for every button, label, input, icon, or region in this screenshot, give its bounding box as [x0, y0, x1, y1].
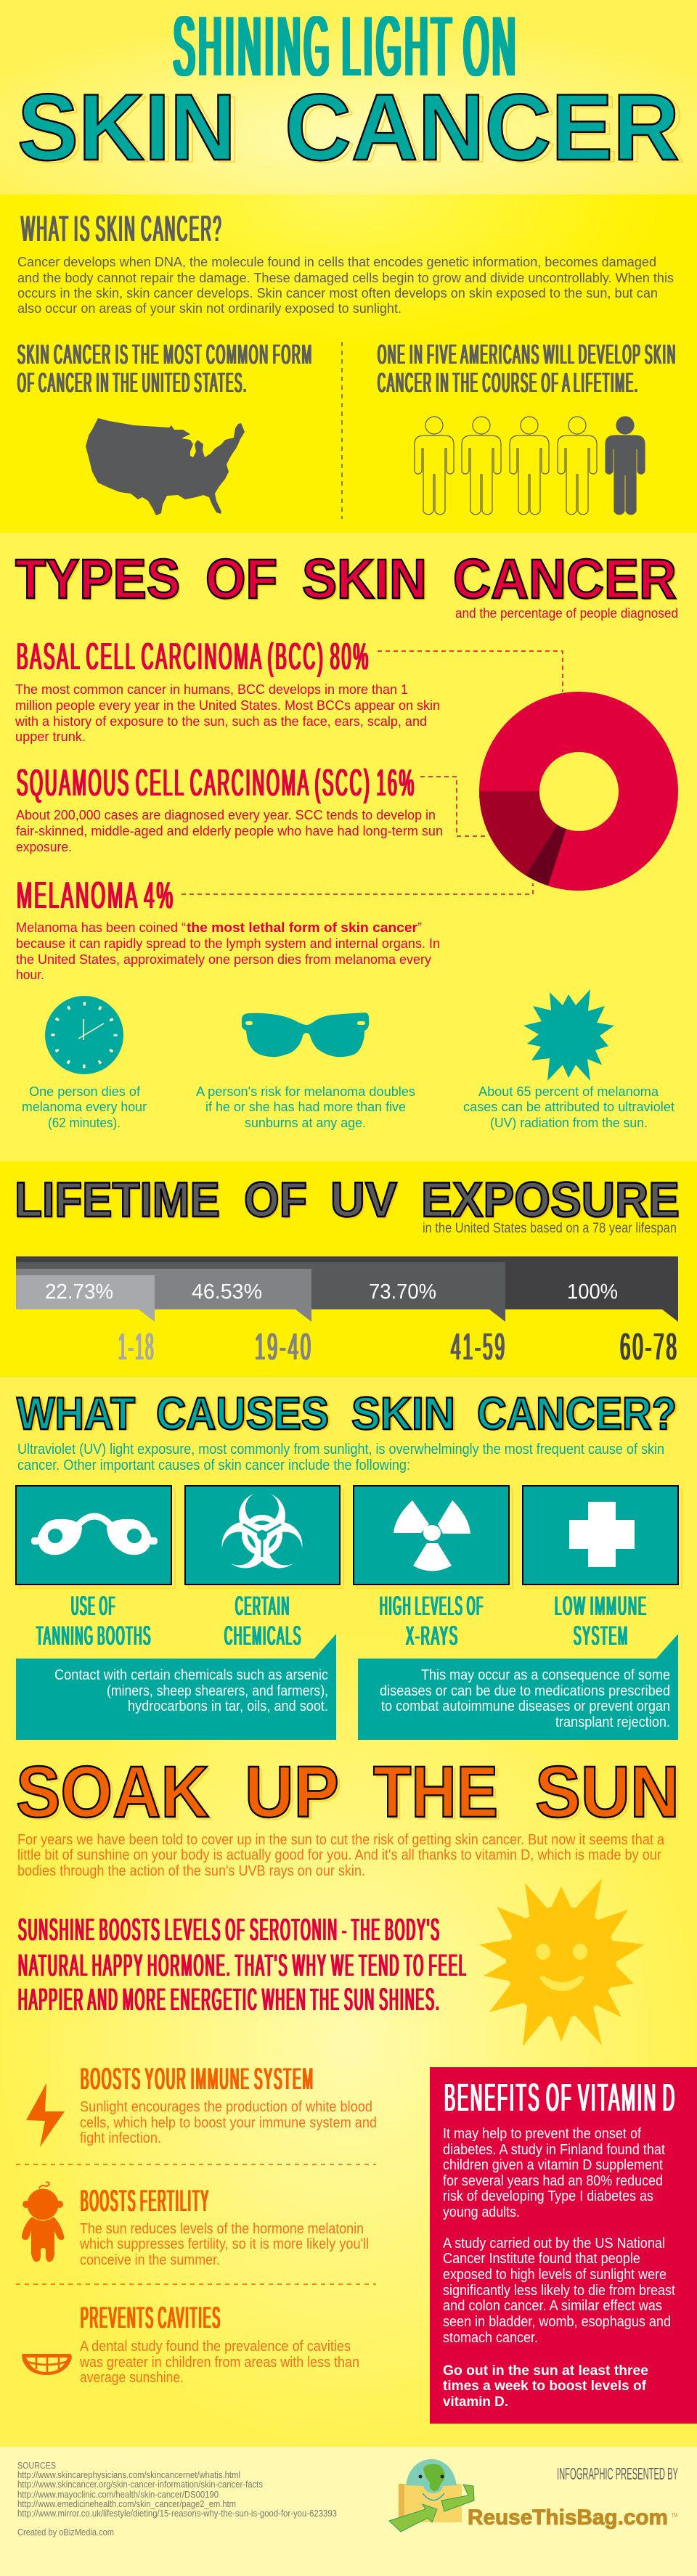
- chart: donut of skin cancer types: [479, 692, 678, 891]
- type: squamous cell carcinoma: About 200,000 cases are diagnosed every year. SCC tends to develop in: [16, 808, 436, 822]
- type: melanoma: the most lethal form of skin cancer: [187, 920, 417, 935]
- chart: cumulative uv bars: 46.53%: [192, 1280, 262, 1304]
- benefit: cavities: [22, 2300, 359, 2386]
- text block: risk of developing Type I diabetes as: [443, 2188, 653, 2204]
- panel: footer: [0, 2447, 697, 2576]
- heading: what causes skin cancer: WHAT: [19, 1389, 137, 1440]
- sources: [17, 2460, 337, 2538]
- connector: melanoma: [182, 883, 533, 894]
- panel: header: [0, 0, 697, 195]
- type: basal cell carcinoma: [15, 636, 440, 744]
- heading: lifetime of uv exposure: EXPOSURE: [423, 1174, 681, 1229]
- caption: sunglasses: sunburns at any age.: [245, 1116, 366, 1130]
- benefit: immune system: BOOSTS YOUR IMMUNE SYSTEM: [81, 2061, 314, 2095]
- heading: types of skin cancer: CANCER: [453, 548, 677, 610]
- heading: soak up the sun: UP: [245, 1751, 339, 1833]
- icon: us map: [86, 418, 245, 515]
- chart: cumulative uv bars: 100%: [567, 1280, 618, 1304]
- caption: clock: [22, 1084, 147, 1130]
- callout: immune system: [358, 1634, 678, 1740]
- sources: http://www.skincancer.org/skin-cancer-information/skin-cancer-facts: [17, 2479, 263, 2490]
- panel: types of skin cancer: [0, 533, 697, 1161]
- title: skin cancer: CANCER: [285, 74, 680, 180]
- benefit: fertility: The sun reduces levels of the hormone melatonin: [80, 2221, 364, 2237]
- type: melanoma: Melanoma has been coined “: [16, 920, 186, 935]
- heading: what causes skin cancer: CAUSES: [158, 1389, 331, 1440]
- logo: reusethisbag: ReuseThisBag.com: [468, 2506, 668, 2530]
- type: melanoma: hour.: [16, 968, 44, 982]
- heading: soak up the sun: SUN: [535, 1751, 680, 1833]
- chart: cumulative uv bars: 73.70%: [369, 1280, 436, 1304]
- icon: five people: [415, 417, 645, 515]
- benefit: immune system: Sunlight encourages the production of white blood: [80, 2099, 372, 2115]
- type: melanoma: the United States, approximately one person dies from melanoma every: [16, 952, 431, 967]
- panel: lifetime of uv exposure: [0, 1161, 697, 1377]
- callout: chemicals: hydrocarbons in tar, oils, and soot.: [128, 1698, 328, 1714]
- text block: A study carried out by the US National: [443, 2236, 665, 2252]
- caption: sunglasses: A person's risk for melanoma doubles: [196, 1084, 415, 1099]
- caption: clock: One person dies of: [29, 1084, 141, 1099]
- stat: most common form: OF CANCER IN THE UNITED STATES.: [17, 368, 248, 398]
- text block: definition: occurs in the skin, skin cancer develops. Skin cancer most often develops on skin exposed to the sun, but can: [17, 286, 658, 300]
- sources: http://www.skincarephysicians.com/skincancernet/whatis.html: [17, 2469, 240, 2480]
- text block: soak intro: [17, 1832, 665, 1879]
- labels: age ranges: 19-40: [255, 1326, 313, 1368]
- caption: clock: melanoma every hour: [22, 1100, 147, 1114]
- icon: radiation: [394, 1500, 470, 1571]
- text block: children given a vitamin D supplement: [443, 2157, 663, 2173]
- card: x-rays: [354, 1486, 513, 1651]
- panel: what is skin cancer: [0, 195, 697, 533]
- card: chemicals: [185, 1486, 343, 1651]
- type: melanoma: because it can rapidly spread to the lymph system and internal organs. In: [16, 936, 440, 951]
- text block: causes intro: [17, 1442, 664, 1473]
- type: squamous cell carcinoma: exposure.: [16, 840, 72, 854]
- title: skin cancer: SKIN: [21, 76, 241, 182]
- text block: [443, 2126, 675, 2410]
- text block: vitamin D.: [443, 2395, 508, 2410]
- panel: what causes skin cancer: [0, 1377, 697, 2447]
- title: skin cancer: [17, 74, 685, 182]
- type: melanoma: MELANOMA 4%: [17, 875, 175, 917]
- caption: sunglasses: [196, 1084, 415, 1130]
- text block: young adults.: [443, 2204, 520, 2220]
- heading: soak up the sun: UP: [248, 1754, 342, 1835]
- labels: age ranges: 41-59: [451, 1326, 507, 1368]
- icon: uv burst: [523, 989, 614, 1081]
- heading: lifetime of uv exposure: UV: [332, 1174, 399, 1229]
- card: immune system: [523, 1486, 682, 1651]
- labels: age ranges: [118, 1326, 679, 1368]
- type: melanoma: ”: [417, 920, 422, 935]
- text block: and colon cancer. A similar effect was: [443, 2298, 662, 2314]
- heading: lifetime of uv exposure: OF: [245, 1174, 309, 1229]
- heading: what causes skin cancer: WHAT: [17, 1389, 135, 1439]
- sources: Created by oBizMedia.com: [17, 2527, 114, 2538]
- caption: clock: (62 minutes).: [48, 1116, 121, 1130]
- text block: seen in bladder, womb, esophagus and: [443, 2314, 671, 2330]
- benefit: cavities: average sunshine.: [80, 2370, 184, 2386]
- caption: sunglasses: if he or she has had more than five: [205, 1100, 406, 1114]
- sources: SOURCES: [17, 2460, 56, 2471]
- type: basal cell carcinoma: with a history of exposure to the sun, such as the face, ears, scalp, and: [15, 714, 427, 729]
- stat: most common form: [17, 340, 313, 398]
- sources: http://www.mirror.co.uk/lifestyle/dieting/15-reasons-why-the-sun-is-good-for-you-623393: [17, 2508, 337, 2519]
- text block: definition: and the body cannot repair the damage. These damaged cells begin to grow and divide uncontrollably. When this: [17, 271, 674, 285]
- benefit: cavities: was greater in children from areas with less than: [79, 2355, 359, 2371]
- type: squamous cell carcinoma: [16, 762, 443, 854]
- card: tanning booths: [16, 1486, 175, 1651]
- heading: lifetime of uv exposure: LIFETIME: [16, 1174, 221, 1229]
- heading: types of skin cancer: SKIN: [303, 549, 428, 612]
- type: basal cell carcinoma: million people every year in the United States. Most BCCs appear on skin: [15, 698, 440, 713]
- caption: uv burst: [463, 1084, 674, 1130]
- heading: lifetime of uv exposure: OF: [244, 1172, 307, 1227]
- text block: Cancer Institute found that people: [443, 2251, 640, 2267]
- text block: exposed to high levels of sunlight were: [443, 2267, 667, 2283]
- text block: stomach cancer.: [443, 2330, 538, 2346]
- heading: lifetime of uv exposure: EXPOSURE: [421, 1172, 680, 1227]
- text block: Go out in the sun at least three: [443, 2363, 648, 2379]
- label: USE OF: [71, 1591, 116, 1621]
- type: basal cell carcinoma: The most common cancer in humans, BCC develops in more than 1: [15, 682, 408, 697]
- text block: significantly less likely to die from breast: [443, 2283, 675, 2299]
- caption: uv burst: cases can be attributed to ultraviolet: [463, 1100, 674, 1114]
- benefit: cavities: PREVENTS CAVITIES: [81, 2300, 221, 2334]
- heading: what causes skin cancer: CANCER?: [479, 1389, 679, 1440]
- type: basal cell carcinoma: upper trunk.: [15, 729, 86, 744]
- panel: what causes skin cancer: TANNING BOOTHS: [36, 1621, 152, 1651]
- heading: types of skin cancer: SKIN: [302, 548, 427, 610]
- heading: soak up the sun: [16, 1751, 682, 1835]
- connector: bcc: [378, 651, 563, 692]
- heading: what causes skin cancer: [17, 1389, 679, 1440]
- label: X-RAYS: [406, 1621, 459, 1651]
- benefit: cavities: A dental study found the prevalence of cavities: [80, 2339, 351, 2355]
- sources: http://www.mayoclinic.com/health/skin-cancer/DS00190: [17, 2489, 219, 2500]
- type: squamous cell carcinoma: fair-skinned, middle-aged and elderly people who have had long-term sun: [16, 824, 443, 838]
- icon: smiling sun: [479, 1878, 645, 2046]
- heading: types of skin cancer: [15, 548, 678, 612]
- icon: teeth: [22, 2354, 72, 2375]
- heading: types of skin cancer: OF: [207, 549, 279, 612]
- panel: benefits of vitamin d: [430, 2067, 697, 2424]
- heading: what causes skin cancer: SKIN: [351, 1389, 455, 1439]
- heading: lifetime of uv exposure: LIFETIME: [15, 1172, 220, 1227]
- title: skin cancer: CANCER: [288, 76, 685, 182]
- label: [224, 1591, 302, 1651]
- card: chemicals: CHEMICALS: [224, 1621, 302, 1651]
- stat: one in five: [378, 340, 677, 398]
- heading: lifetime of uv exposure: UV: [330, 1172, 397, 1227]
- icon: clock: [45, 996, 123, 1074]
- heading: what causes skin cancer: SKIN: [354, 1389, 457, 1440]
- text block: It may help to prevent the onset of: [443, 2126, 641, 2142]
- label: [555, 1591, 648, 1651]
- benefit: fertility: [22, 2182, 369, 2268]
- heading: types of skin cancer: TYPES: [15, 548, 180, 610]
- label: [380, 1591, 484, 1651]
- callout: immune system: transplant rejection.: [555, 1714, 670, 1730]
- heading: types of skin cancer: TYPES: [17, 549, 182, 612]
- caption: uv burst: About 65 percent of melanoma: [478, 1084, 659, 1099]
- benefit: fertility: conceive in the summer.: [80, 2252, 220, 2268]
- panel: what is skin cancer: WHAT IS SKIN CANCER?: [21, 208, 223, 249]
- text block: serotonin: [18, 1913, 468, 2017]
- icon: lightning: [26, 2083, 65, 2147]
- logo: reusethisbag: TM: [672, 2512, 677, 2519]
- subheading: and the percentage of people diagnosed: [455, 606, 678, 621]
- benefit: immune system: [26, 2061, 377, 2147]
- text block: for several years had an 80% reduced: [443, 2173, 663, 2189]
- chart: cumulative uv bars: [16, 1256, 678, 1322]
- title: skin cancer: SKIN: [17, 74, 236, 180]
- sources: http://www.emedicinehealth.com/skin_cancer/page2_em.htm: [17, 2498, 236, 2509]
- icon: cross: [569, 1502, 635, 1567]
- callout: chemicals: (miners, sheep shearers, and farmers),: [107, 1683, 328, 1699]
- heading: types of skin cancer: CANCER: [455, 549, 678, 612]
- heading: soak up the sun: SOAK: [16, 1751, 209, 1833]
- benefit: fertility: which suppresses fertility, so it is more likely you'll: [79, 2236, 369, 2252]
- label: [36, 1591, 152, 1651]
- heading: types of skin cancer: OF: [205, 548, 277, 610]
- chart: cumulative uv bars: 22.73%: [45, 1280, 113, 1304]
- benefit: fertility: BOOSTS FERTILITY: [81, 2183, 210, 2217]
- text block: causes intro: cancer. Other important causes of skin cancer include the following:: [17, 1457, 410, 1473]
- callout: immune system: diseases or can be due to medications prescribed: [380, 1683, 670, 1699]
- icon: baby: [22, 2182, 64, 2262]
- heading: lifetime of uv exposure: [15, 1172, 681, 1229]
- card: chemicals: CERTAIN: [235, 1591, 290, 1621]
- text block: times a week to boost levels of: [443, 2379, 647, 2394]
- text block: definition: Cancer develops when DNA, the molecule found in cells that encodes genetic information, becomes damaged: [17, 255, 656, 269]
- icon: biohazard: [218, 1489, 306, 1568]
- text block: soak intro: bodies through the action of the sun's UVB rays on our skin.: [17, 1863, 365, 1879]
- connector: scc: [420, 777, 488, 836]
- text block: definition: also occur on areas of your skin not ordinarily exposed to sunlight.: [17, 301, 402, 316]
- callout: immune system: to combat autoimmune diseases or prevent organ: [381, 1698, 670, 1714]
- icon: sunglasses: [242, 1013, 369, 1057]
- text block: diabetes. A study in Finland found that: [443, 2142, 665, 2158]
- caption: uv burst: (UV) radiation from the sun.: [490, 1116, 648, 1130]
- callout: immune system: This may occur as a consequence of some: [421, 1667, 670, 1683]
- labels: age ranges: 1-18: [118, 1326, 155, 1368]
- logo: reusethisbag: [389, 2459, 677, 2532]
- benefit: immune system: cells, which help to boost your immune system and: [80, 2115, 377, 2131]
- heading: what causes skin cancer: CANCER?: [477, 1389, 677, 1439]
- callout: chemicals: [16, 1634, 336, 1740]
- benefit: immune system: fight infection.: [80, 2130, 161, 2146]
- heading: soak up the sun: SUN: [538, 1754, 682, 1835]
- heading: soak up the sun: THE: [373, 1751, 498, 1833]
- type: melanoma: [16, 875, 440, 982]
- icon: goggles: [31, 1516, 158, 1555]
- callout: chemicals: Contact with certain chemicals such as arsenic: [54, 1667, 328, 1683]
- heading: soak up the sun: THE: [376, 1754, 501, 1835]
- heading: soak up the sun: SOAK: [19, 1754, 212, 1835]
- panel: what is skin cancer: SKIN CANCER IS THE MOST COMMON FORM: [17, 340, 313, 370]
- card: x-rays: HIGH LEVELS OF: [380, 1591, 484, 1621]
- text block: definition: [17, 255, 674, 316]
- heading: what causes skin cancer: CAUSES: [156, 1389, 329, 1439]
